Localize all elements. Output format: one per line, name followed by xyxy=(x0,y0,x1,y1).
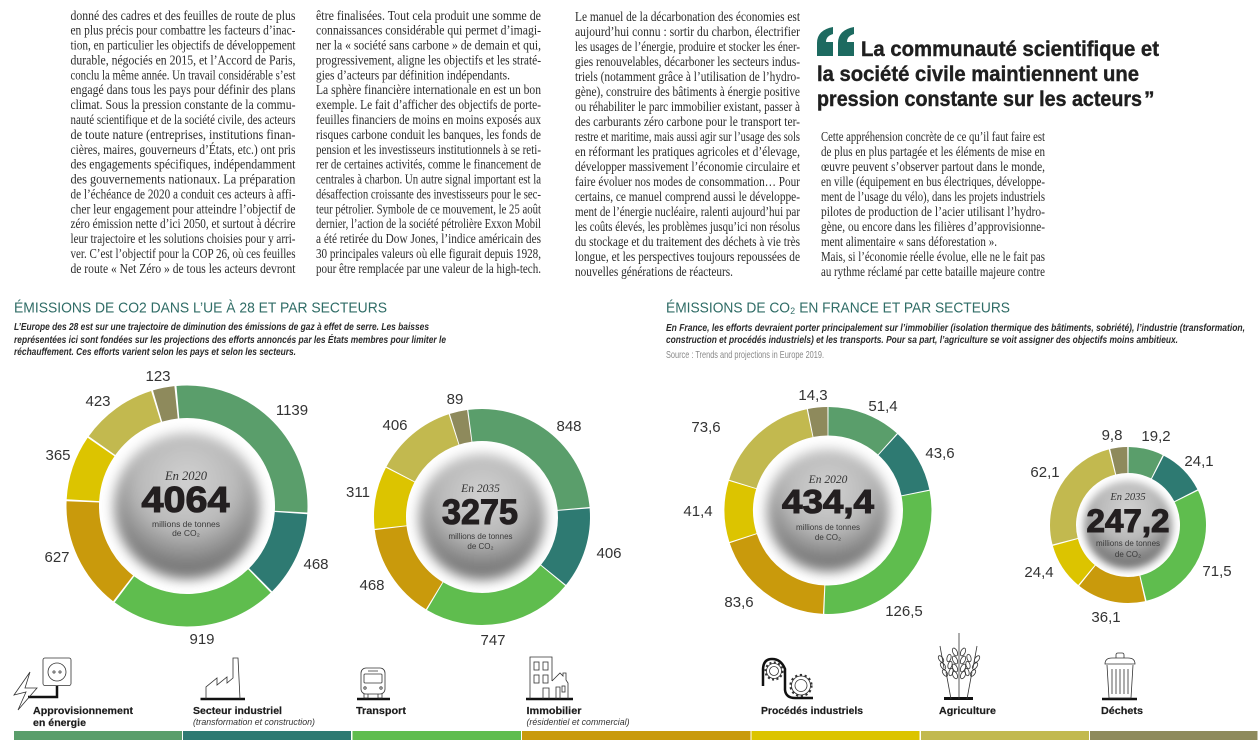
text column 1: nauté scientifique et de la société civile, des acteurs xyxy=(70,112,295,127)
icon: bus xyxy=(357,668,390,699)
legend label: energy supply: Approvisionnement xyxy=(33,705,134,717)
text column 1: durable, négociés en 2015, et l’Accord de Paris, xyxy=(70,53,295,67)
donut values: EU 2020: 365 xyxy=(45,447,71,464)
text column 1: engagé dans tous les pays pour définir des plans xyxy=(70,82,295,97)
donut chart: France 2020 xyxy=(702,384,954,637)
text column 4: Mais, si l’économie réelle évolue, elle ne le fait pas xyxy=(821,249,1045,264)
icon: wheat xyxy=(937,633,981,699)
text column 2: La sphère financière internationale en est un bon xyxy=(316,82,541,97)
donut values: France 2020: 14,3 xyxy=(798,387,828,404)
text column 2: centrales à charbon. Un autre signal important est la xyxy=(316,172,541,187)
legend label: real estate: Immobilier xyxy=(526,705,582,717)
text column 4: gène, ou encore dans les filières d’approvisionne- xyxy=(821,219,1045,234)
pull quote: ” xyxy=(1144,88,1154,111)
text column 1: cières, maires, gouverneurs d’États, etc.) ont pris xyxy=(70,141,295,158)
text column 3: du stockage et du traitement des déchets à vie très xyxy=(575,234,800,249)
legend label: agriculture: Agriculture xyxy=(939,705,996,717)
legend label: energy supply xyxy=(33,705,134,729)
donut values: France 2035: 36,1 xyxy=(1091,609,1121,626)
donut chart: EU 2020: de CO₂ xyxy=(172,528,200,538)
text column 2: feuilles financiers de moins en moins exposés aux xyxy=(316,112,541,127)
donut values: EU 2020 xyxy=(44,368,329,648)
text column 4 xyxy=(821,129,1045,279)
text column 1 xyxy=(70,8,296,276)
donut values: France 2035: 24,1 xyxy=(1184,453,1214,470)
donut values: France 2035: 19,2 xyxy=(1141,428,1171,445)
pull quote: pression constante sur les acteurs xyxy=(817,88,1142,111)
text column 1: leur trajectoire et les solutions choisies pour y arri- xyxy=(70,231,296,246)
icon: gears and belt xyxy=(763,659,813,698)
legend label: real estate: (résidentiel et commercial) xyxy=(526,717,630,728)
donut values: France 2020: 73,6 xyxy=(691,419,721,436)
donut chart: France 2020: millions de tonnes xyxy=(796,523,860,532)
text column 4: pilotes de production de l’acier utilisant l’hydro- xyxy=(821,204,1045,219)
donut values: EU 2035: 406 xyxy=(382,417,408,434)
icon: trash can xyxy=(1102,653,1137,699)
pull quote xyxy=(817,27,1159,111)
text column 1: en plus précis pour combattre les facteurs d’inac- xyxy=(70,23,296,38)
legend label: real estate xyxy=(526,705,630,728)
text block: France intro xyxy=(666,322,1245,361)
text column 1: des gouvernements nationaux. La préparation xyxy=(70,172,296,187)
text column 3: restre et maritime, mais aussi agir sur l’usage des sols xyxy=(575,129,800,144)
text column 4: œuvre peuvent s’observer partout dans le monde, xyxy=(821,159,1045,174)
legend label: industrial processes: Procédés industriels xyxy=(761,705,863,717)
text column 1: tion, en particulier les objectifs de développement xyxy=(70,38,296,53)
text column 1: de toute nature (entreprises, institutions finan- xyxy=(70,127,296,143)
text column 2: dernier, l’action de la société pétrolière Exxon Mobil xyxy=(316,216,541,231)
donut values: France 2020: 41,4 xyxy=(683,503,713,520)
text column 3: triels (notamment grâce à l’utilisation de l’hydro- xyxy=(575,69,800,85)
text column 3: gies renouvelables, décarboner les secteurs indus- xyxy=(575,54,800,69)
text column 4: ment de l’usage du vélo), dans les projets industriels xyxy=(821,189,1045,205)
donut values: EU 2035: 747 xyxy=(480,632,506,649)
text column 1: cher leur engagement pour atteindre l’objectif de xyxy=(70,201,295,216)
text block: EU intro: L’Europe des 28 est sur une trajectoire de diminution des émissions de gaz à effet de serre. Les baisses xyxy=(14,321,429,333)
legend label: industrial sector: (transformation et construction) xyxy=(193,717,315,728)
text column 2: teur pétrolier. Symbole de ce mouvement, le 25 août xyxy=(316,201,541,216)
donut chart: France 2035: En 2035 xyxy=(1109,492,1146,503)
text column 4: de plus en plus partagée et les éléments de mise en xyxy=(821,144,1045,159)
donut values: EU 2035: 468 xyxy=(359,577,385,594)
donut chart: EU 2035: de CO₂ xyxy=(467,542,494,551)
legend label: waste: Déchets xyxy=(1101,705,1143,717)
donut values: France 2020: 83,6 xyxy=(724,594,754,611)
text column 2: pension et les investisseurs institutionnels à se reti- xyxy=(316,142,541,157)
text column 2: 30 principales valeurs où elle figurait depuis 1928, xyxy=(316,246,541,261)
pull quote: La communauté scientifique et xyxy=(861,38,1159,61)
text column 3: développer massivement l’économie circulaire et xyxy=(575,159,800,174)
donut chart: EU 2020: En 2020 xyxy=(164,469,208,483)
donut values: EU 2035: 89 xyxy=(447,391,463,408)
text column 3: des carburants zéro carbone pour le transport ter- xyxy=(575,114,800,129)
icon: energy supply xyxy=(14,658,71,710)
legend label: transport: Transport xyxy=(356,705,407,717)
text column 1: conclu la même année. Un travail considérable s’est xyxy=(70,67,296,82)
text column 1: de route « Net Zéro » de tous les acteurs devront xyxy=(70,261,296,276)
icon: factory xyxy=(200,658,245,699)
text column 2: désaffection croissante des investisseurs pour le sec- xyxy=(316,186,541,201)
pull quote: la société civile maintiennent une xyxy=(817,63,1139,86)
text column 2: a été retirée du Dow Jones, l’indice américain des xyxy=(316,231,541,246)
donut chart: France 2035 xyxy=(1036,433,1220,617)
legend label: industrial sector: Secteur industriel xyxy=(193,705,282,717)
text column 2: gies d’acteurs par définition indépendants. xyxy=(316,67,510,82)
heading: EU emissions: ÉMISSIONS DE CO2 DANS L’UE À 28 ET PAR SECTEURS xyxy=(14,300,387,316)
donut values: France 2035: 62,1 xyxy=(1030,464,1060,481)
donut chart: France 2035: millions de tonnes xyxy=(1096,539,1160,548)
donut chart: EU 2020 xyxy=(40,359,334,653)
donut values: EU 2020: 423 xyxy=(85,393,111,410)
text column 2: ner la « société sans carbone » de demain et qui, xyxy=(316,38,541,53)
text block: EU intro xyxy=(14,321,446,358)
donut chart: France 2020: En 2020 xyxy=(808,474,848,486)
donut values: EU 2020: 1139 xyxy=(276,402,308,419)
text column 2: risques carbone conduit les banques, les fonds de xyxy=(316,127,541,142)
donut chart: EU 2020: 4064 xyxy=(142,479,230,520)
donut chart: EU 2035: millions de tonnes xyxy=(448,532,513,541)
text column 2: rer de certaines activités, comme le financement de xyxy=(316,157,541,172)
donut values: EU 2035: 311 xyxy=(346,484,370,501)
donut values: France 2035: 9,8 xyxy=(1102,427,1122,444)
text column 3: en réformant les pratiques agricoles et d’élevage, xyxy=(575,144,800,159)
text column 1: des engagements spécifiques, indépendamment xyxy=(70,157,296,172)
text column 3 xyxy=(575,9,800,279)
donut values: France 2035 xyxy=(1024,427,1232,626)
text column 3: Le manuel de la décarbonation des économies est xyxy=(575,9,800,24)
donut values: EU 2035: 406 xyxy=(596,545,622,562)
text column 3: nouvelles générations de réacteurs. xyxy=(575,264,733,279)
text column 2: pour être remplacée par une valeur de la high-tech. xyxy=(316,261,541,276)
text column 1: zéro émission nette d’ici 2050, et surtout à décrire xyxy=(70,216,295,231)
text column 3: gène), construire des bâtiments à énergie positive xyxy=(575,84,800,100)
text column 3: les usages de l’énergie, produire et stocker les éner- xyxy=(575,39,800,54)
icon: buildings xyxy=(526,657,573,699)
text column 4: Cette appréhension concrète de ce qu’il faut faire est xyxy=(821,129,1045,144)
text column 3: certains, ce manuel comprend aussi le développe- xyxy=(575,189,800,204)
text column 3: ment de l’énergie nucléaire, ralenti aujourd’hui par xyxy=(575,204,800,219)
donut values: France 2035: 24,4 xyxy=(1024,564,1054,581)
text column 2: connaissances considérable qui permet d’imagi- xyxy=(316,23,541,38)
icon: opening quotation mark xyxy=(817,27,854,56)
source note: Source : Trends and projections in Europe 2019. xyxy=(666,349,824,361)
heading: France emissions: ÉMISSIONS DE CO₂ EN FRANCE ET PAR SECTEURS xyxy=(666,300,1010,316)
donut values: France 2020: 126,5 xyxy=(885,603,923,620)
donut values: France 2020: 43,6 xyxy=(925,445,955,462)
donut chart: France 2020: 434,4 xyxy=(782,483,875,520)
donut values: France 2035: 71,5 xyxy=(1202,563,1232,580)
text column 1: donné des cadres et des feuilles de route de plus xyxy=(70,8,295,23)
text column 2 xyxy=(316,8,541,276)
text column 1: climat. Sous la pression constante de la commu- xyxy=(70,97,296,112)
text column 1: de l’échéance de 2020 a conduit ces acteurs à affi- xyxy=(70,186,296,201)
donut values: EU 2020: 123 xyxy=(145,368,171,385)
donut values: EU 2020: 627 xyxy=(44,549,70,566)
donut chart: EU 2020: millions de tonnes xyxy=(152,519,220,529)
donut values: EU 2035 xyxy=(346,391,622,649)
text column 2: progressivement, aligne les objectifs et les straté- xyxy=(316,53,541,67)
text column 3: les coûts élevés, les problèmes jusqu’ici non résolus xyxy=(575,219,800,234)
text column 4: au rythme réclamé par cette bataille majeure contre xyxy=(821,264,1045,279)
donut chart: France 2035: 247,2 xyxy=(1086,503,1170,539)
donut chart: EU 2035: En 2035 xyxy=(460,483,500,495)
text column 1: ver. C’est l’objectif pour la COP 26, où ces feuilles xyxy=(70,246,295,261)
text block: EU intro: réchauffement. Ces efforts varient selon les pays et selon les secteurs. xyxy=(14,346,296,358)
text block: EU intro: représentées ici sont fondées sur les projections des efforts annoncés par les États membres pour limiter le xyxy=(14,333,446,346)
donut chart: France 2020: de CO₂ xyxy=(815,533,841,542)
donut values: France 2020 xyxy=(683,387,955,620)
bottom legend bar xyxy=(14,731,1258,740)
donut chart: EU 2035 xyxy=(352,387,612,647)
legend label: industrial sector xyxy=(193,705,315,728)
text column 2: être finalisées. Tout cela produit une somme de xyxy=(316,8,541,23)
text column 2: exemple. Le fait d’afficher des objectifs de porte- xyxy=(316,97,541,112)
donut values: France 2020: 51,4 xyxy=(868,398,898,415)
text column 3: ou réhabiliter le parc immobilier existant, passer à xyxy=(575,99,800,114)
donut values: EU 2035: 848 xyxy=(556,418,582,435)
donut values: EU 2020: 468 xyxy=(303,556,329,573)
donut chart: EU 2035: 3275 xyxy=(442,493,518,532)
donut chart: France 2035: de CO₂ xyxy=(1115,550,1141,559)
text column 4: en ville (équipement en bus électriques, développe- xyxy=(821,174,1045,190)
text column 3: faire évoluer nos modes de consommation… Pour xyxy=(575,174,800,189)
text column 3: aujourd’hui connu : sortir du charbon, électrifier xyxy=(575,24,800,39)
text column 3: longue, et les perspectives toujours repoussées de xyxy=(575,249,800,264)
text column 4: ment alimentaire « sans déforestation ». xyxy=(821,234,997,249)
donut values: EU 2020: 919 xyxy=(189,631,215,648)
legend label: energy supply: en énergie xyxy=(33,717,86,729)
